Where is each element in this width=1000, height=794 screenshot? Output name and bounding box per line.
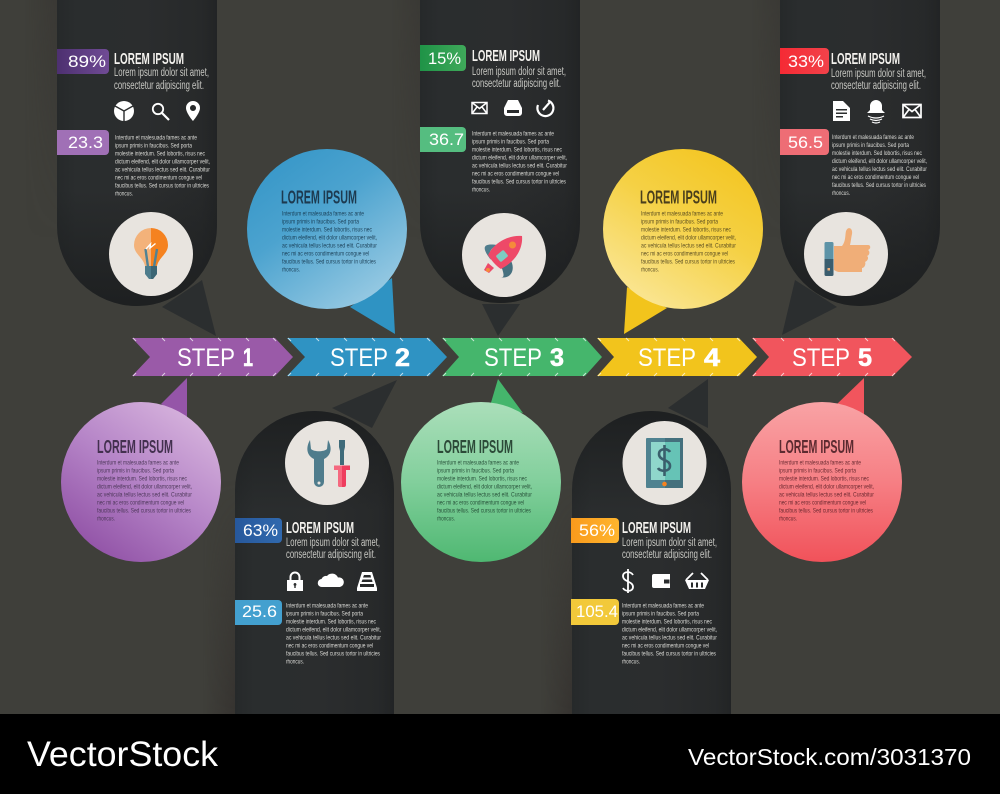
body text: Interdum et malesuada fames ac ante: [286, 602, 368, 610]
icon: thumbs up: [804, 212, 888, 296]
heading and intro text: [831, 51, 926, 92]
body text: Interdum et malesuada fames ac ante: [832, 134, 914, 141]
heading and intro text: LOREM IPSUM: [286, 520, 354, 537]
badge: 33%: 33%: [788, 52, 824, 71]
speech bubble: yellow: molestie interdum. Sed lobortis, risus nec: [641, 226, 732, 234]
speech bubble: purple: dictum eleifend, elit dolor ullamcorper velit,: [97, 484, 192, 490]
step arrow 3: STEP: [484, 344, 542, 372]
step arrow 5: STEP: [792, 344, 850, 372]
speech bubble: purple: ac vehicula tellus lectus sed elit. Curabitur: [97, 492, 193, 498]
icon: drive: [504, 100, 522, 116]
speech bubble: green: ac vehicula tellus lectus sed elit. Curabitur: [437, 492, 533, 498]
speech bubble: yellow: LOREM IPSUM: [640, 188, 717, 208]
speech bubble: yellow: ac vehicula tellus lectus sed elit. Curabitur: [641, 242, 737, 250]
badge: 105.4: 105.4: [576, 602, 618, 621]
speech bubble: green: dictum eleifend, elit dolor ullamcorper velit,: [437, 484, 532, 490]
step arrow 4: [597, 338, 757, 376]
icon: pie box: [114, 101, 134, 121]
speech bubble: yellow: [603, 149, 763, 334]
heading and intro text: Lorem ipsum dolor sit amet,: [472, 66, 566, 78]
body text: [286, 602, 382, 666]
speech bubble: blue: ipsum primis in faucibus. Sed porta: [282, 218, 359, 226]
body text: molestie interdum. Sed lobortis, risus nec: [472, 146, 563, 154]
heading and intro text: LOREM IPSUM: [114, 51, 184, 68]
body text: [115, 134, 211, 198]
heading and intro text: consectetur adipiscing elit.: [472, 78, 561, 90]
speech bubble: blue: ac vehicula tellus lectus sed elit. Curabitur: [282, 242, 378, 250]
speech bubble: blue: [247, 149, 407, 334]
speech bubble: purple: LOREM IPSUM: [97, 437, 173, 457]
icon: bell: [867, 100, 885, 123]
badge: 56.5: 56.5: [788, 133, 823, 152]
body text: ipsum primis in faucibus. Sed porta: [115, 142, 192, 150]
heading and intro text: [286, 520, 380, 561]
step arrow 1: STEP: [177, 344, 235, 372]
pointer: step 2 card: [332, 380, 397, 428]
footer: watermark bar: VectorStock: [27, 735, 219, 774]
heading and intro text: Lorem ipsum dolor sit amet,: [831, 68, 926, 80]
body text: faucibus tellus. Sed cursus tortor in ultricies: [472, 178, 567, 186]
badge: 56%: [571, 518, 619, 543]
speech bubble: red: molestie interdum. Sed lobortis, risus nec: [779, 476, 870, 482]
badge: 56%: 56%: [579, 521, 615, 540]
body text: nec mi ac eros condimentum congue vel: [286, 642, 373, 650]
icon: envelope: [472, 102, 487, 114]
speech bubble: yellow: faucibus tellus. Sed cursus tortor in ultricies: [641, 258, 736, 266]
body text: ac vehicula tellus lectus sed elit. Curabitur: [472, 162, 568, 170]
step arrow 3: 3: [550, 344, 564, 372]
body text: ac vehicula tellus lectus sed elit. Curabitur: [115, 166, 211, 174]
badge: 36.7: [420, 127, 466, 152]
heading and intro text: Lorem ipsum dolor sit amet,: [622, 537, 717, 549]
icon: magnifier: [153, 104, 169, 120]
speech bubble: purple: ipsum primis in faucibus. Sed porta: [97, 468, 174, 474]
body text: rhoncus.: [286, 658, 304, 666]
body text: [472, 130, 568, 194]
speech bubble: red: [742, 378, 902, 562]
body text: Interdum et malesuada fames ac ante: [472, 130, 554, 138]
body text: molestie interdum. Sed lobortis, risus nec: [115, 150, 206, 158]
step arrow 1: [132, 338, 293, 376]
body text: rhoncus.: [622, 658, 640, 666]
icon: tray: [357, 572, 377, 591]
speech bubble: yellow: rhoncus.: [641, 266, 659, 274]
badge: 89%: 89%: [68, 52, 106, 71]
pointer: step 4 card: [668, 379, 708, 428]
heading and intro text: [472, 48, 566, 90]
icon: light bulb: [109, 212, 193, 296]
panel: step 2 card: [235, 411, 394, 714]
speech bubble: purple: nec mi ac eros condimentum congue vel: [97, 500, 184, 506]
icon: tablet with dollar: [622, 421, 706, 505]
speech bubble: purple: Interdum et malesuada fames ac ante: [97, 460, 179, 466]
speech bubble: blue: faucibus tellus. Sed cursus tortor in ultricies: [282, 258, 377, 266]
step arrow 5: 5: [858, 344, 872, 372]
heading and intro text: consectetur adipiscing elit.: [831, 80, 921, 92]
body text: Interdum et malesuada fames ac ante: [622, 602, 704, 610]
body text: nec mi ac eros condimentum congue vel: [472, 170, 559, 178]
icon: wallet: [652, 574, 670, 588]
speech bubble: green: faucibus tellus. Sed cursus tortor in ultricies: [437, 508, 532, 514]
panel: step 3 card: [420, 0, 580, 303]
badge: 25.6: 25.6: [242, 602, 277, 621]
badge: 89%: [57, 49, 109, 74]
speech bubble: blue: LOREM IPSUM: [281, 188, 357, 208]
body text: dictum eleifend, elit dolor ullamcorper velit,: [622, 626, 717, 634]
badge: 56.5: [780, 129, 829, 155]
heading and intro text: Lorem ipsum dolor sit amet,: [286, 537, 380, 549]
body text: rhoncus.: [472, 186, 490, 194]
body text: faucibus tellus. Sed cursus tortor in ultricies: [622, 650, 717, 658]
speech bubble: purple: molestie interdum. Sed lobortis, risus nec: [97, 476, 188, 482]
speech bubble: yellow: Interdum et malesuada fames ac ante: [641, 210, 723, 218]
icon: map pin: [186, 101, 200, 121]
speech bubble: blue: Interdum et malesuada fames ac ante: [282, 210, 364, 218]
body text: molestie interdum. Sed lobortis, risus nec: [622, 618, 713, 626]
body text: nec mi ac eros condimentum congue vel: [832, 174, 919, 181]
heading and intro text: LOREM IPSUM: [831, 51, 900, 68]
speech bubble: red: nec mi ac eros condimentum congue vel: [779, 500, 866, 506]
body text: molestie interdum. Sed lobortis, risus nec: [286, 618, 377, 626]
pointer: step 3 card: [482, 304, 520, 336]
body text: dictum eleifend, elit dolor ullamcorper velit,: [286, 626, 381, 634]
body text: ipsum primis in faucibus. Sed porta: [622, 610, 699, 618]
panel: step 1 card: [57, 0, 217, 306]
heading and intro text: LOREM IPSUM: [472, 48, 540, 65]
step arrow 5: [752, 338, 912, 376]
badge: 105.4: [571, 599, 619, 625]
step arrow 2: 2: [395, 344, 410, 372]
body text: dictum eleifend, elit dolor ullamcorper velit,: [832, 158, 927, 165]
speech bubble: blue: rhoncus.: [282, 266, 300, 274]
heading and intro text: consectetur adipiscing elit.: [286, 549, 376, 561]
speech bubble: red: faucibus tellus. Sed cursus tortor in ultricies: [779, 508, 874, 514]
heading and intro text: consectetur adipiscing elit.: [622, 549, 712, 561]
body text: ac vehicula tellus lectus sed elit. Curabitur: [286, 634, 382, 642]
panel: step 5 card: [780, 0, 940, 306]
body text: ac vehicula tellus lectus sed elit. Curabitur: [622, 634, 718, 642]
badge: 36.7: 36.7: [429, 130, 464, 149]
heading and intro text: consectetur adipiscing elit.: [114, 80, 204, 92]
body text: [832, 134, 928, 197]
speech bubble: yellow: dictum eleifend, elit dolor ullamcorper velit,: [641, 234, 736, 242]
speech bubble: green: molestie interdum. Sed lobortis, risus nec: [437, 476, 528, 482]
speech bubble: green: nec mi ac eros condimentum congue vel: [437, 500, 524, 506]
speech bubble: red: LOREM IPSUM: [779, 437, 854, 457]
footer: watermark bar: [0, 714, 1000, 794]
heading and intro text: [622, 520, 717, 561]
body text: Interdum et malesuada fames ac ante: [115, 134, 197, 142]
step arrow 1: 1: [243, 344, 253, 372]
body text: molestie interdum. Sed lobortis, risus nec: [832, 150, 923, 157]
speech bubble: green: LOREM IPSUM: [437, 437, 513, 457]
badge: 25.6: [235, 600, 282, 625]
body text: nec mi ac eros condimentum congue vel: [115, 174, 202, 182]
heading and intro text: LOREM IPSUM: [622, 520, 691, 537]
heading and intro text: [114, 51, 209, 92]
panel: step 4 card: [571, 411, 731, 714]
badge: 33%: [780, 48, 829, 74]
body text: dictum eleifend, elit dolor ullamcorper velit,: [115, 158, 210, 166]
icon: gauge: [537, 100, 553, 116]
body text: rhoncus.: [115, 190, 133, 198]
badge: 15%: 15%: [428, 49, 461, 68]
speech bubble: red: Interdum et malesuada fames ac ante: [779, 460, 861, 466]
icon: envelope: [903, 104, 921, 118]
speech bubble: green: Interdum et malesuada fames ac ante: [437, 460, 519, 466]
icon: document: [833, 101, 850, 121]
speech bubble: blue: molestie interdum. Sed lobortis, risus nec: [282, 226, 373, 234]
speech bubble: yellow: ipsum primis in faucibus. Sed porta: [641, 218, 718, 226]
icon: wrench and screwdriver: [285, 421, 369, 505]
body text: faucibus tellus. Sed cursus tortor in ultricies: [832, 182, 927, 189]
body text: faucibus tellus. Sed cursus tortor in ultricies: [286, 650, 381, 658]
speech bubble: purple: [61, 378, 221, 562]
badge: 23.3: 23.3: [68, 133, 103, 152]
body text: ipsum primis in faucibus. Sed porta: [832, 142, 909, 149]
speech bubble: red: dictum eleifend, elit dolor ullamcorper velit,: [779, 484, 874, 490]
icon: cloud: [318, 574, 344, 587]
icon: dollar: [623, 569, 633, 593]
speech bubble: green: rhoncus.: [437, 516, 455, 522]
speech bubble: red: ac vehicula tellus lectus sed elit. Curabitur: [779, 492, 875, 498]
speech bubble: red: ipsum primis in faucibus. Sed porta: [779, 468, 856, 474]
badge: 15%: [420, 45, 466, 71]
speech bubble: green: ipsum primis in faucibus. Sed porta: [437, 468, 514, 474]
step arrow 4: 4: [704, 344, 720, 372]
speech bubble: purple: rhoncus.: [97, 516, 115, 522]
body text: ipsum primis in faucibus. Sed porta: [472, 138, 549, 146]
pointer: step 1 card: [162, 280, 216, 336]
body text: ac vehicula tellus lectus sed elit. Curabitur: [832, 166, 928, 173]
speech bubble: yellow: nec mi ac eros condimentum congue vel: [641, 250, 728, 258]
badge: 23.3: [57, 130, 109, 155]
icon: padlock: [287, 572, 303, 591]
badge: 63%: 63%: [243, 521, 278, 540]
body text: nec mi ac eros condimentum congue vel: [622, 642, 709, 650]
body text: [622, 602, 718, 666]
step arrow 4: STEP: [638, 344, 696, 372]
step arrow 3: [442, 338, 602, 376]
body text: rhoncus.: [832, 190, 850, 197]
badge: 63%: [235, 518, 282, 543]
body text: dictum eleifend, elit dolor ullamcorper velit,: [472, 154, 567, 162]
speech bubble: purple: faucibus tellus. Sed cursus tortor in ultricies: [97, 508, 192, 514]
speech bubble: blue: nec mi ac eros condimentum congue vel: [282, 250, 369, 258]
icon: basket: [685, 573, 709, 589]
speech bubble: blue: dictum eleifend, elit dolor ullamcorper velit,: [282, 234, 377, 242]
footer: watermark bar: VectorStock.com/3031370: [688, 744, 971, 770]
step arrow 2: STEP: [330, 344, 388, 372]
icon: rocket: [462, 213, 546, 297]
heading and intro text: Lorem ipsum dolor sit amet,: [114, 67, 209, 79]
pointer: step 5 card: [782, 280, 837, 335]
body text: ipsum primis in faucibus. Sed porta: [286, 610, 363, 618]
body text: faucibus tellus. Sed cursus tortor in ultricies: [115, 182, 210, 190]
step arrow 2: [287, 338, 447, 376]
speech bubble: green: [401, 379, 561, 562]
speech bubble: red: rhoncus.: [779, 516, 797, 522]
